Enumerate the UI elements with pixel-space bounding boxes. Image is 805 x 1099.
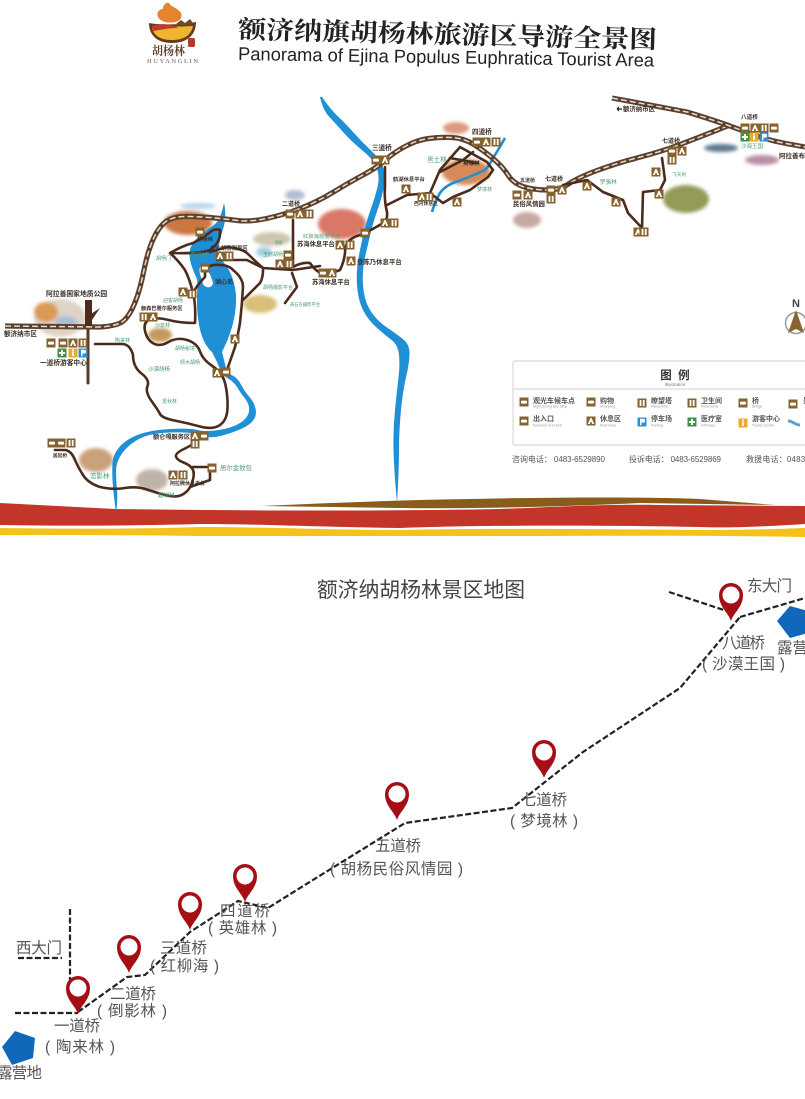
panorama place labels: 苏海休息平台 xyxy=(312,277,350,286)
panorama place labels: 倒影林 xyxy=(190,251,208,259)
panorama place labels: 八道桥 xyxy=(741,113,758,121)
legend panel: 游客中心 xyxy=(752,414,780,423)
legend panel: Bridge xyxy=(752,404,762,408)
route labels: 三道桥 xyxy=(160,939,207,957)
legend panel: 瞭望塔 xyxy=(651,396,672,405)
header logo xyxy=(147,3,198,65)
park roads xyxy=(55,147,665,496)
compass xyxy=(786,298,805,334)
panorama place labels: 陶来林 xyxy=(115,337,130,344)
rivers and lake xyxy=(112,97,505,513)
panorama place labels: 黑土林 xyxy=(427,155,447,164)
panorama place labels: 鹤湖休息平台 xyxy=(393,175,425,183)
legend panel: 购物 xyxy=(600,396,614,405)
panorama place labels: 胡杨林 xyxy=(197,235,214,243)
panorama place labels: 胡杨摄影平台 xyxy=(263,284,293,291)
legend panel: Shopping xyxy=(600,404,615,408)
campsite markers xyxy=(2,606,805,1065)
route labels: ( 梦境林 ) xyxy=(510,811,578,830)
panorama place labels: 额仑嘎服务区 xyxy=(153,433,190,441)
route labels: 四道桥 xyxy=(220,902,270,920)
panorama place labels: 金沙胡杨观景区 xyxy=(210,244,248,252)
panorama place labels: 胡杨门 xyxy=(156,255,171,262)
route labels xyxy=(0,577,805,1082)
route dashed lines xyxy=(15,592,805,1013)
panorama place labels: 英雄林 xyxy=(463,159,480,167)
panorama place labels: 沙泉林 xyxy=(155,322,170,329)
legend panel: 桥 xyxy=(752,396,759,405)
bottom decorative band xyxy=(0,498,805,537)
panorama place labels: 苏海休息平台 xyxy=(297,239,335,248)
legend panel: 卫生间 xyxy=(701,396,722,405)
panorama place labels: 阿拉善国家地质公园 xyxy=(46,289,107,298)
header logo: 胡杨林 xyxy=(152,42,185,59)
panorama place labels: 居尔金敖包 xyxy=(220,463,253,472)
legend panel: Illustration xyxy=(665,382,686,387)
panorama place labels: 沙漠胡杨 xyxy=(148,365,171,373)
panorama place labels: 碧绿林 xyxy=(158,491,175,499)
contact phone numbers: 投诉电话： 0483-6529869 xyxy=(629,454,722,464)
legend panel: Rest Area xyxy=(600,424,616,428)
panorama place labels: 二道桥 xyxy=(282,200,300,208)
compass: N xyxy=(792,298,800,310)
panorama place labels: 四道桥 xyxy=(472,127,492,136)
header logo: HUYANGLIN xyxy=(147,58,198,65)
contact phone numbers: 咨询电话： 0483-6529890 xyxy=(512,454,606,464)
route labels: ( 胡杨民俗风情园 ) xyxy=(330,860,463,878)
main scenic highway xyxy=(5,98,805,327)
panorama place labels: 西河休息区 xyxy=(414,200,438,207)
legend panel: 医疗室 xyxy=(701,414,722,423)
panorama place labels: 阿拉善布 xyxy=(779,151,805,160)
legend panel: 观光车候车点 xyxy=(533,396,575,405)
panorama place labels: 五道桥 xyxy=(520,177,535,184)
legend panel: Sightseeing Bus Stop xyxy=(533,404,567,408)
route map title: 额济纳胡杨林景区地图 xyxy=(317,579,525,602)
route labels: 东大门 xyxy=(747,577,792,595)
panorama place labels: 额济纳市区 xyxy=(4,329,37,338)
legend panel: Parking xyxy=(651,424,663,428)
route labels: 八道桥 xyxy=(722,634,765,652)
island xyxy=(199,267,213,287)
panorama place labels: 红柳海观景平台 xyxy=(303,232,340,240)
panorama place labels: 倒影 xyxy=(275,239,283,245)
legend panel: Entrance And Exit xyxy=(533,424,562,428)
panorama place labels: 倾木胡杨 xyxy=(180,359,200,366)
route labels: ( 英雄林 ) xyxy=(208,919,277,937)
service icons xyxy=(46,124,778,480)
route labels: ( 倒影林 ) xyxy=(97,1002,167,1020)
route labels: 七道桥 xyxy=(521,791,567,809)
panorama place labels: 恋影林 xyxy=(90,471,110,480)
panorama place labels: 悬石农摄影平台 xyxy=(290,301,320,308)
geopark gate marker xyxy=(85,300,100,326)
legend panel: 图 例 xyxy=(660,368,690,382)
route labels: ( 陶来林 ) xyxy=(45,1038,115,1056)
legend panel xyxy=(513,361,805,445)
legend panel: Panorama xyxy=(651,404,668,408)
route labels: 一道桥 xyxy=(54,1017,100,1035)
legend panel: 停车场 xyxy=(651,414,672,423)
panorama place labels: 觅秋林 xyxy=(162,398,177,405)
legend panel: 休息区 xyxy=(600,414,621,423)
panorama place labels: 额济纳市区 xyxy=(623,104,656,113)
panorama place labels: 查陈乃休息平台 xyxy=(357,257,402,266)
panorama place labels: 罗骆林 xyxy=(600,178,617,186)
panorama place labels: 七道桥 xyxy=(545,175,563,183)
route labels: 二道桥 xyxy=(110,985,156,1003)
panorama place labels: 民俗风情园 xyxy=(513,199,545,208)
title: 额济纳旗胡杨林旅游区导游全景图 xyxy=(237,10,658,56)
scenic photo patches xyxy=(34,122,779,491)
legend panel: Restrooms xyxy=(701,404,719,408)
panorama place labels: 阿拉腾休息平台 xyxy=(170,480,205,487)
contact phone numbers xyxy=(512,454,805,464)
panorama place labels: 三道桥 xyxy=(372,143,392,152)
panorama place labels: 湖心岛 xyxy=(215,278,233,286)
panorama place labels: 七道桥 xyxy=(662,137,680,145)
route labels: 五道桥 xyxy=(375,837,421,855)
route labels: ( 红柳海 ) xyxy=(150,957,219,975)
panorama place labels: 梦境林 xyxy=(477,186,492,193)
route labels: ( 沙漠王国 ) xyxy=(702,655,785,673)
title xyxy=(237,10,658,71)
legend panel: Tourist Center xyxy=(752,424,775,428)
panorama place labels: 飞天树 xyxy=(672,171,686,178)
panorama place labels: 胡杨秘境 xyxy=(175,345,195,352)
legend panel: Infirmary xyxy=(701,424,715,428)
title: Panorama of Ejina Populus Euphratica Tourist Area xyxy=(238,43,655,71)
panorama place labels: 沙海王国 xyxy=(741,142,764,150)
panorama place labels: 居延桥 xyxy=(53,452,67,459)
panorama place labels: 迎客胡杨 xyxy=(163,297,183,304)
panorama place labels: 玉府胡杨 xyxy=(263,251,283,258)
route labels: 西大门 xyxy=(16,939,62,957)
panorama place labels: 额森巴雅尔服务区 xyxy=(141,304,183,312)
panorama place labels xyxy=(4,104,805,499)
legend panel: 出入口 xyxy=(533,414,554,423)
location pins xyxy=(66,583,743,1014)
panorama place labels: 一道桥游客中心 xyxy=(40,358,87,367)
